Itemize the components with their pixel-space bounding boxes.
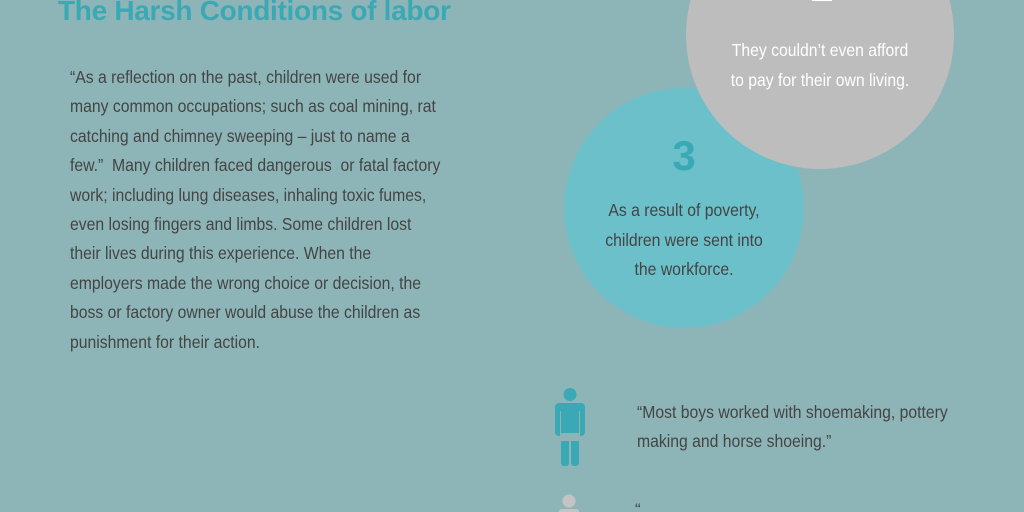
body text block: work; including lung diseases, inhaling toxic fumes, xyxy=(70,185,426,205)
circle 3 text xyxy=(605,200,763,279)
body text block: few.” Many children faced dangerous or fatal factory xyxy=(70,155,440,175)
circle 3 text: the workforce. xyxy=(635,259,733,279)
body text block: boss or factory owner would abuse the children as xyxy=(70,302,420,322)
circle text: They couldn’t even afford xyxy=(732,40,908,60)
boys text xyxy=(637,402,948,451)
circle: living costs xyxy=(686,0,954,169)
boys text: making and horse shoeing.” xyxy=(637,431,831,451)
body text block: many common occupations; such as coal mining, rat xyxy=(70,96,436,116)
icon: boy figure xyxy=(555,388,585,466)
body text block: punishment for their action. xyxy=(70,332,260,352)
circle 3 text: children were sent into xyxy=(605,230,763,250)
body text block: their lives during this experience. When the xyxy=(70,243,371,263)
body text block: even losing fingers and limbs. Some children lost xyxy=(70,214,411,234)
circle 3: poverty xyxy=(564,88,804,328)
number bar xyxy=(812,0,832,1)
body text block xyxy=(70,67,440,352)
circle text: to pay for their own living. xyxy=(731,70,909,90)
body text block: catching and chimney sweeping – just to name a xyxy=(70,126,410,146)
circle 3 text: As a result of poverty, xyxy=(608,200,760,220)
circle text xyxy=(731,40,909,90)
body text block: “As a reflection on the past, children were used for xyxy=(70,67,421,87)
body text block: employers made the wrong choice or decision, the xyxy=(70,273,421,293)
boys text: “Most boys worked with shoemaking, pottery xyxy=(637,402,948,422)
icon: girl figure (partial) xyxy=(559,494,579,512)
number 3: 3 xyxy=(672,132,696,179)
